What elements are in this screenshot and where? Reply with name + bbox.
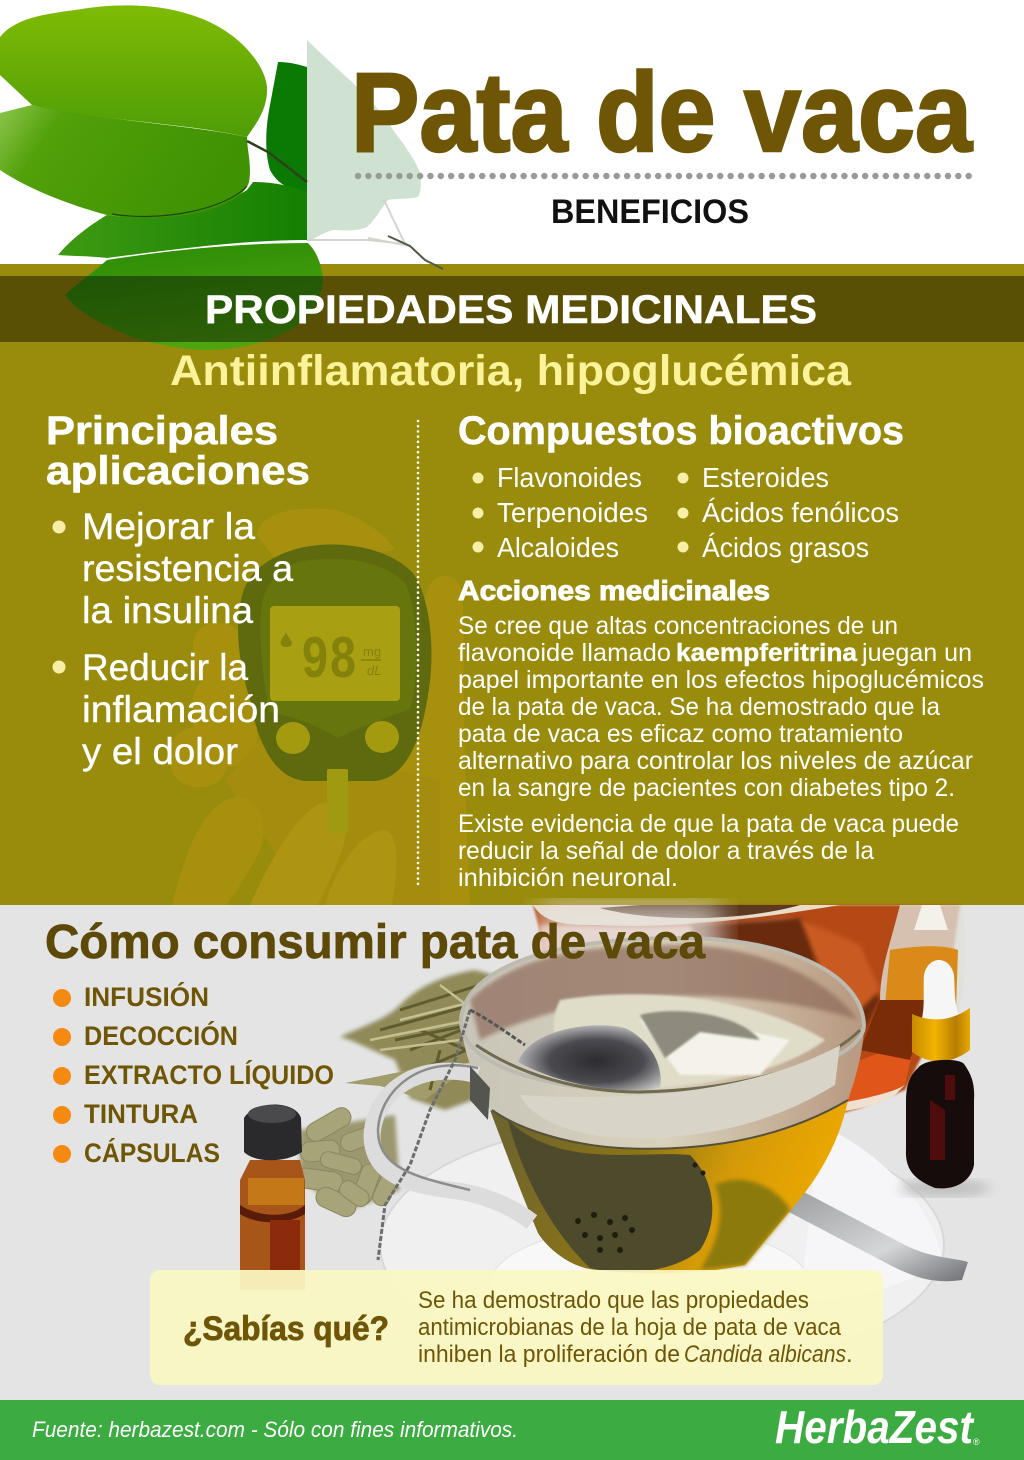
cup handle — [372, 1071, 532, 1222]
vertical dotted divider — [417, 421, 419, 887]
heading band: propiedades medicinales — [0, 276, 1024, 342]
cup glass reflection — [520, 1045, 840, 1138]
title: Pata de vaca — [351, 50, 973, 175]
bullet: resistencia a la insulina: Mejorar la — [82, 506, 255, 547]
callout text: inhiben la proliferación de — [418, 1341, 680, 1368]
background: header — [0, 0, 1024, 264]
compounds list: Ácidos fenólicos — [702, 497, 899, 528]
callout text — [418, 1287, 853, 1368]
illustration: teapot behind cup — [533, 905, 960, 1125]
panel: bioactive compounds — [458, 409, 984, 892]
illustration: amber bottle — [240, 1104, 305, 1290]
list: forms of consumption: EXTRACTO LÍQUIDO — [84, 1059, 334, 1090]
text block: medicinal actions: kaempferitrina — [676, 639, 858, 667]
leaf: bottom upper — [58, 182, 307, 258]
list: forms of consumption — [53, 981, 334, 1168]
meter unit mg/dL: mg — [363, 644, 381, 659]
heading: principales aplicaciones — [46, 409, 310, 493]
callout text: . — [846, 1341, 853, 1368]
illustration: glucose meter held in hand: dL — [367, 663, 381, 678]
illustration: meter body — [238, 545, 431, 781]
list: forms of consumption: CÁPSULAS — [84, 1137, 220, 1168]
source text: Fuente: herbazest.com - Sólo con fines informativos. — [32, 1417, 518, 1442]
compounds list: Esteroides — [702, 462, 829, 493]
text block: medicinal actions: en la sangre de pacientes con diabetes tipo 2. — [458, 774, 955, 802]
text block: medicinal actions: de la pata de vaca. Se ha demostrado que la — [458, 693, 940, 721]
text block: pain evidence: inhibición neuronal. — [458, 864, 678, 892]
illustration: dried herbs — [340, 970, 510, 1110]
callout text: antimicrobianas de la hoja de pata de vaca — [418, 1314, 842, 1341]
infuser chain — [378, 1010, 470, 1260]
illustration: meter screen — [270, 606, 400, 701]
text block: medicinal actions: Se cree que altas concentraciones de un — [458, 612, 898, 640]
callout heading: ¿Sabías qué? — [183, 1310, 389, 1348]
compounds list: Ácidos grasos — [702, 532, 869, 563]
illustration: glucose meter held in hand — [170, 508, 470, 905]
illustration: spoon — [785, 1190, 968, 1281]
dotted title rule — [358, 173, 970, 179]
panel: medicinal properties background — [0, 264, 1024, 905]
text block: medicinal actions: alternativo para controlar los niveles de azúcar — [458, 747, 973, 775]
illustration: saucer — [380, 1120, 944, 1370]
icon: drop on screen — [281, 632, 292, 647]
text block: medicinal actions — [458, 612, 984, 802]
heading text: PROPIEDADES MEDICINALES — [205, 288, 817, 332]
tea infuser ball top — [518, 1025, 661, 1090]
text block: medicinal actions: pata de vaca es eficaz como tratamiento — [458, 720, 903, 748]
bullet: inflamacion y dolor: Reducir la — [82, 647, 248, 688]
compounds list: Terpenoides — [497, 497, 648, 528]
illustration: capsules — [294, 1104, 400, 1220]
list: forms of consumption: TINTURA — [84, 1099, 198, 1129]
text block: medicinal actions: papel importante en los efectos hipoglucémicos — [458, 666, 984, 694]
registered mark: ® — [973, 1437, 980, 1447]
subtitle: BENEFICIOS — [551, 193, 749, 231]
leaf: top upper lobe — [0, 5, 267, 137]
compounds list — [472, 462, 899, 563]
heading: acciones medicinales: Acciones medicinales — [458, 575, 770, 606]
list: forms of consumption: DECOCCIÓN — [84, 1020, 238, 1051]
panel: how to consume background — [0, 905, 1024, 1400]
leaf: back upper right — [266, 62, 307, 192]
leaf: top lower lobe — [0, 105, 250, 218]
heading: como consumir: Cómo consumir pata de vaca — [45, 916, 705, 969]
callout: did you know — [150, 1270, 883, 1385]
illustration: tea cup — [372, 938, 864, 1273]
text block: pain evidence: Existe evidencia de que la pata de vaca puede — [458, 810, 959, 838]
compounds list: Flavonoides — [497, 462, 642, 493]
bullet: resistencia a la insulina — [52, 506, 293, 631]
infuser lower half — [508, 1120, 712, 1272]
list: forms of consumption: INFUSIÓN — [84, 981, 209, 1012]
text block: medicinal actions: flavonoide llamado — [458, 639, 671, 667]
text block: pain evidence: reducir la señal de dolor a través de la — [458, 837, 874, 865]
meter reading 98: 98 — [301, 628, 357, 696]
logo: HerbaZest: HerbaZest — [775, 1401, 974, 1453]
text block: pain evidence — [458, 810, 959, 892]
leaf: bottom large — [65, 243, 323, 350]
meter buttons — [276, 722, 310, 754]
bullet: resistencia a la insulina: la insulina — [82, 590, 253, 631]
text block: medicinal actions: juegan un — [861, 639, 972, 667]
heading: principales aplicaciones: Principales — [46, 409, 278, 453]
bullet: inflamacion y dolor: y el dolor — [82, 731, 238, 772]
cup rim — [461, 938, 864, 1092]
cup upper glass — [461, 938, 864, 1149]
callout text: Candida albicans — [684, 1341, 846, 1368]
compounds list: Alcaloides — [497, 532, 619, 563]
footer — [0, 1400, 1024, 1460]
test strip — [327, 769, 348, 833]
illustration: dropper bottle — [899, 960, 991, 1196]
bullet: inflamacion y dolor — [52, 647, 280, 772]
heading: principales aplicaciones: aplicaciones — [46, 449, 310, 493]
illustration: small honey vial behind — [860, 905, 965, 1060]
properties subtitle: Antiinflamatoria, hipoglucémica — [170, 347, 852, 395]
bullet: inflamacion y dolor: inflamación — [82, 689, 280, 730]
illustration: hand and fingers — [170, 508, 470, 905]
panel: main applications — [46, 409, 310, 772]
illustration: tea, herbs, capsules and bottles — [240, 905, 991, 1370]
heading: compuestos bioactivos: Compuestos bioactivos — [458, 409, 904, 453]
callout text: Se ha demostrado que las propiedades — [418, 1287, 809, 1314]
soft fade behind heading — [540, 905, 720, 975]
illustration: leaves — [0, 5, 443, 350]
tea liquid — [490, 1100, 848, 1273]
bullet: resistencia a la insulina: resistencia a — [82, 548, 293, 589]
leaf: faded right part — [307, 40, 421, 242]
